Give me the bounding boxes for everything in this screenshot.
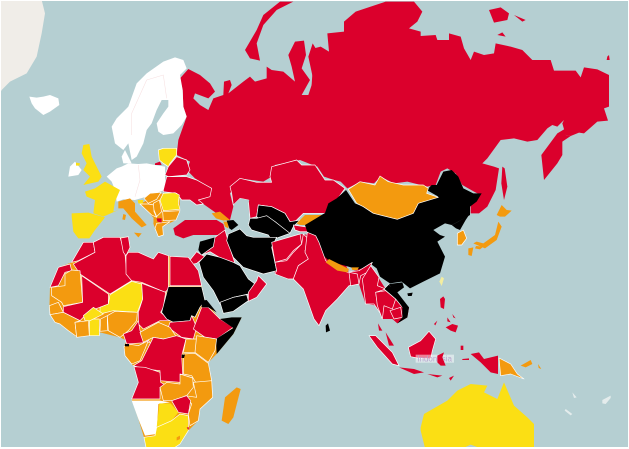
Sicily: [134, 233, 142, 237]
Mongolia: [348, 176, 438, 219]
Botswana: [157, 403, 178, 427]
Syria: [198, 237, 215, 255]
Philippines: [434, 296, 458, 332]
Albania: [153, 218, 156, 227]
Indonesia ghost label: Indonesia: [417, 354, 453, 363]
Serbia: [153, 200, 162, 217]
Turkey: [173, 220, 225, 238]
Cambodia: [390, 307, 402, 319]
Denmark: [122, 150, 132, 163]
South Africa: [144, 414, 188, 449]
Sri Lanka: [326, 323, 330, 332]
Niger: [100, 281, 143, 314]
Kenya: [195, 336, 217, 362]
Cameroon: [123, 321, 150, 344]
Tanzania: [183, 353, 212, 384]
Spain and Portugal: [72, 213, 105, 238]
Southern Europe: [118, 192, 225, 238]
Northern Ireland: [76, 163, 80, 166]
Azerbaijan: [227, 220, 238, 230]
Croatia and Bosnia: [140, 204, 157, 217]
Papua New Guinea: [499, 358, 524, 379]
Mali: [63, 276, 108, 321]
Saudi Arabia: [199, 254, 255, 304]
Italy: [118, 198, 147, 227]
Iceland: [29, 95, 59, 115]
Kazakhstan: [230, 160, 345, 222]
South and Southeast Asia, Oceania: [293, 232, 611, 449]
Caspian Sea: [233, 198, 253, 237]
Togo and Benin: [100, 316, 107, 331]
Bulgaria: [163, 211, 180, 221]
Swaziland: [187, 427, 189, 430]
Yemen: [220, 295, 248, 313]
Hokkaido: [497, 205, 512, 217]
Pacific islands: [565, 392, 611, 415]
Sardinia: [122, 214, 126, 220]
Rwanda: [182, 355, 185, 358]
Ukraine: [163, 177, 212, 205]
Ghana: [89, 319, 99, 336]
India: [293, 232, 372, 326]
Iran: [227, 229, 277, 274]
Ireland: [68, 162, 82, 177]
Pakistan: [275, 234, 310, 279]
Namibia: [132, 401, 170, 436]
North Korea: [452, 215, 469, 230]
Sulawesi: [437, 352, 446, 366]
Sumatra: [369, 336, 399, 366]
Java and Lesser Sunda islands: [399, 367, 454, 381]
Greece: [155, 222, 170, 237]
Arctic and Pacific Russian islands: [489, 7, 610, 200]
Egypt: [170, 256, 202, 286]
Melanesian islands: [521, 360, 541, 369]
East Asia: [305, 170, 512, 296]
Afghanistan: [272, 234, 302, 262]
Kyushu: [468, 247, 473, 256]
Africa and Middle East: [49, 229, 348, 449]
Iraq: [202, 230, 235, 263]
Baltic states: [158, 148, 177, 167]
Bhutan: [351, 267, 359, 270]
Thailand: [376, 291, 396, 319]
Scandinavia and Finland: [112, 57, 187, 160]
Nepal: [326, 259, 349, 272]
Mauritania: [52, 270, 83, 306]
Myanmar: [362, 266, 386, 314]
South Asia landmass: [272, 234, 348, 326]
Malay Peninsula: [378, 323, 394, 346]
Armenia: [223, 222, 228, 228]
South Sudan: [168, 316, 197, 339]
Balkan landmass: [140, 193, 180, 237]
Kyrgyzstan: [297, 215, 325, 225]
Gabon and Congo: [124, 341, 148, 364]
France: [85, 182, 120, 217]
Somalia: [216, 317, 242, 354]
Central European borders: [135, 165, 140, 197]
Zambia: [160, 374, 193, 401]
Taiwan: [439, 277, 444, 286]
Australia: [421, 382, 534, 449]
Moluccas: [461, 346, 469, 360]
Libya: [126, 252, 168, 292]
Morocco: [72, 242, 95, 262]
Hainan: [407, 293, 413, 296]
Nigeria: [107, 311, 137, 337]
Oman and UAE: [248, 276, 267, 301]
Borneo: [408, 331, 436, 359]
Uzbekistan: [257, 205, 300, 233]
Shikoku: [475, 246, 483, 249]
China: [305, 170, 482, 288]
Guinea: [50, 312, 80, 337]
DR Congo: [133, 336, 186, 382]
Zimbabwe: [172, 396, 191, 414]
Ivory Coast: [75, 321, 89, 337]
Israel and Jordan: [190, 252, 205, 265]
Tunisia: [121, 237, 130, 256]
Romania: [160, 193, 180, 211]
Algeria: [73, 237, 132, 294]
Central Europe: [107, 163, 165, 202]
Madagascar: [222, 387, 241, 424]
South Korea: [457, 230, 467, 245]
United Kingdom: [82, 144, 102, 185]
Hungary: [144, 192, 161, 203]
Angola: [132, 367, 167, 399]
Central African Republic: [140, 322, 177, 342]
West Papua: [471, 352, 498, 374]
Bangladesh: [349, 272, 359, 286]
Burkina Faso: [83, 307, 103, 321]
Slovenia: [138, 200, 143, 204]
Equatorial Guinea: [125, 344, 129, 346]
Greenland: [0, 0, 45, 93]
Uganda: [183, 339, 197, 352]
Laos: [384, 284, 407, 311]
Eritrea: [202, 300, 217, 312]
Nordic borders: [132, 75, 167, 135]
Kaliningrad: [155, 162, 162, 165]
Central Asia and Caucasus: [190, 160, 345, 265]
Ethiopia: [193, 307, 233, 339]
Senegal: [49, 302, 63, 315]
Novaya Zemlya: [245, 2, 293, 61]
Mozambique and Malawi: [185, 381, 213, 426]
Lesotho: [177, 436, 180, 441]
Vietnam: [389, 282, 409, 323]
Chad: [138, 283, 170, 329]
Western Sahara: [50, 264, 72, 287]
Turkmenistan: [248, 216, 290, 240]
Honshu: [473, 222, 502, 248]
Indochina landmass: [349, 266, 409, 323]
Sudan: [162, 287, 205, 322]
Macedonia: [157, 218, 162, 223]
Tajikistan: [293, 225, 310, 232]
Belarus: [165, 157, 190, 177]
Georgia: [212, 212, 230, 221]
Africa landmass: [49, 237, 242, 449]
Russia: [177, 2, 609, 220]
